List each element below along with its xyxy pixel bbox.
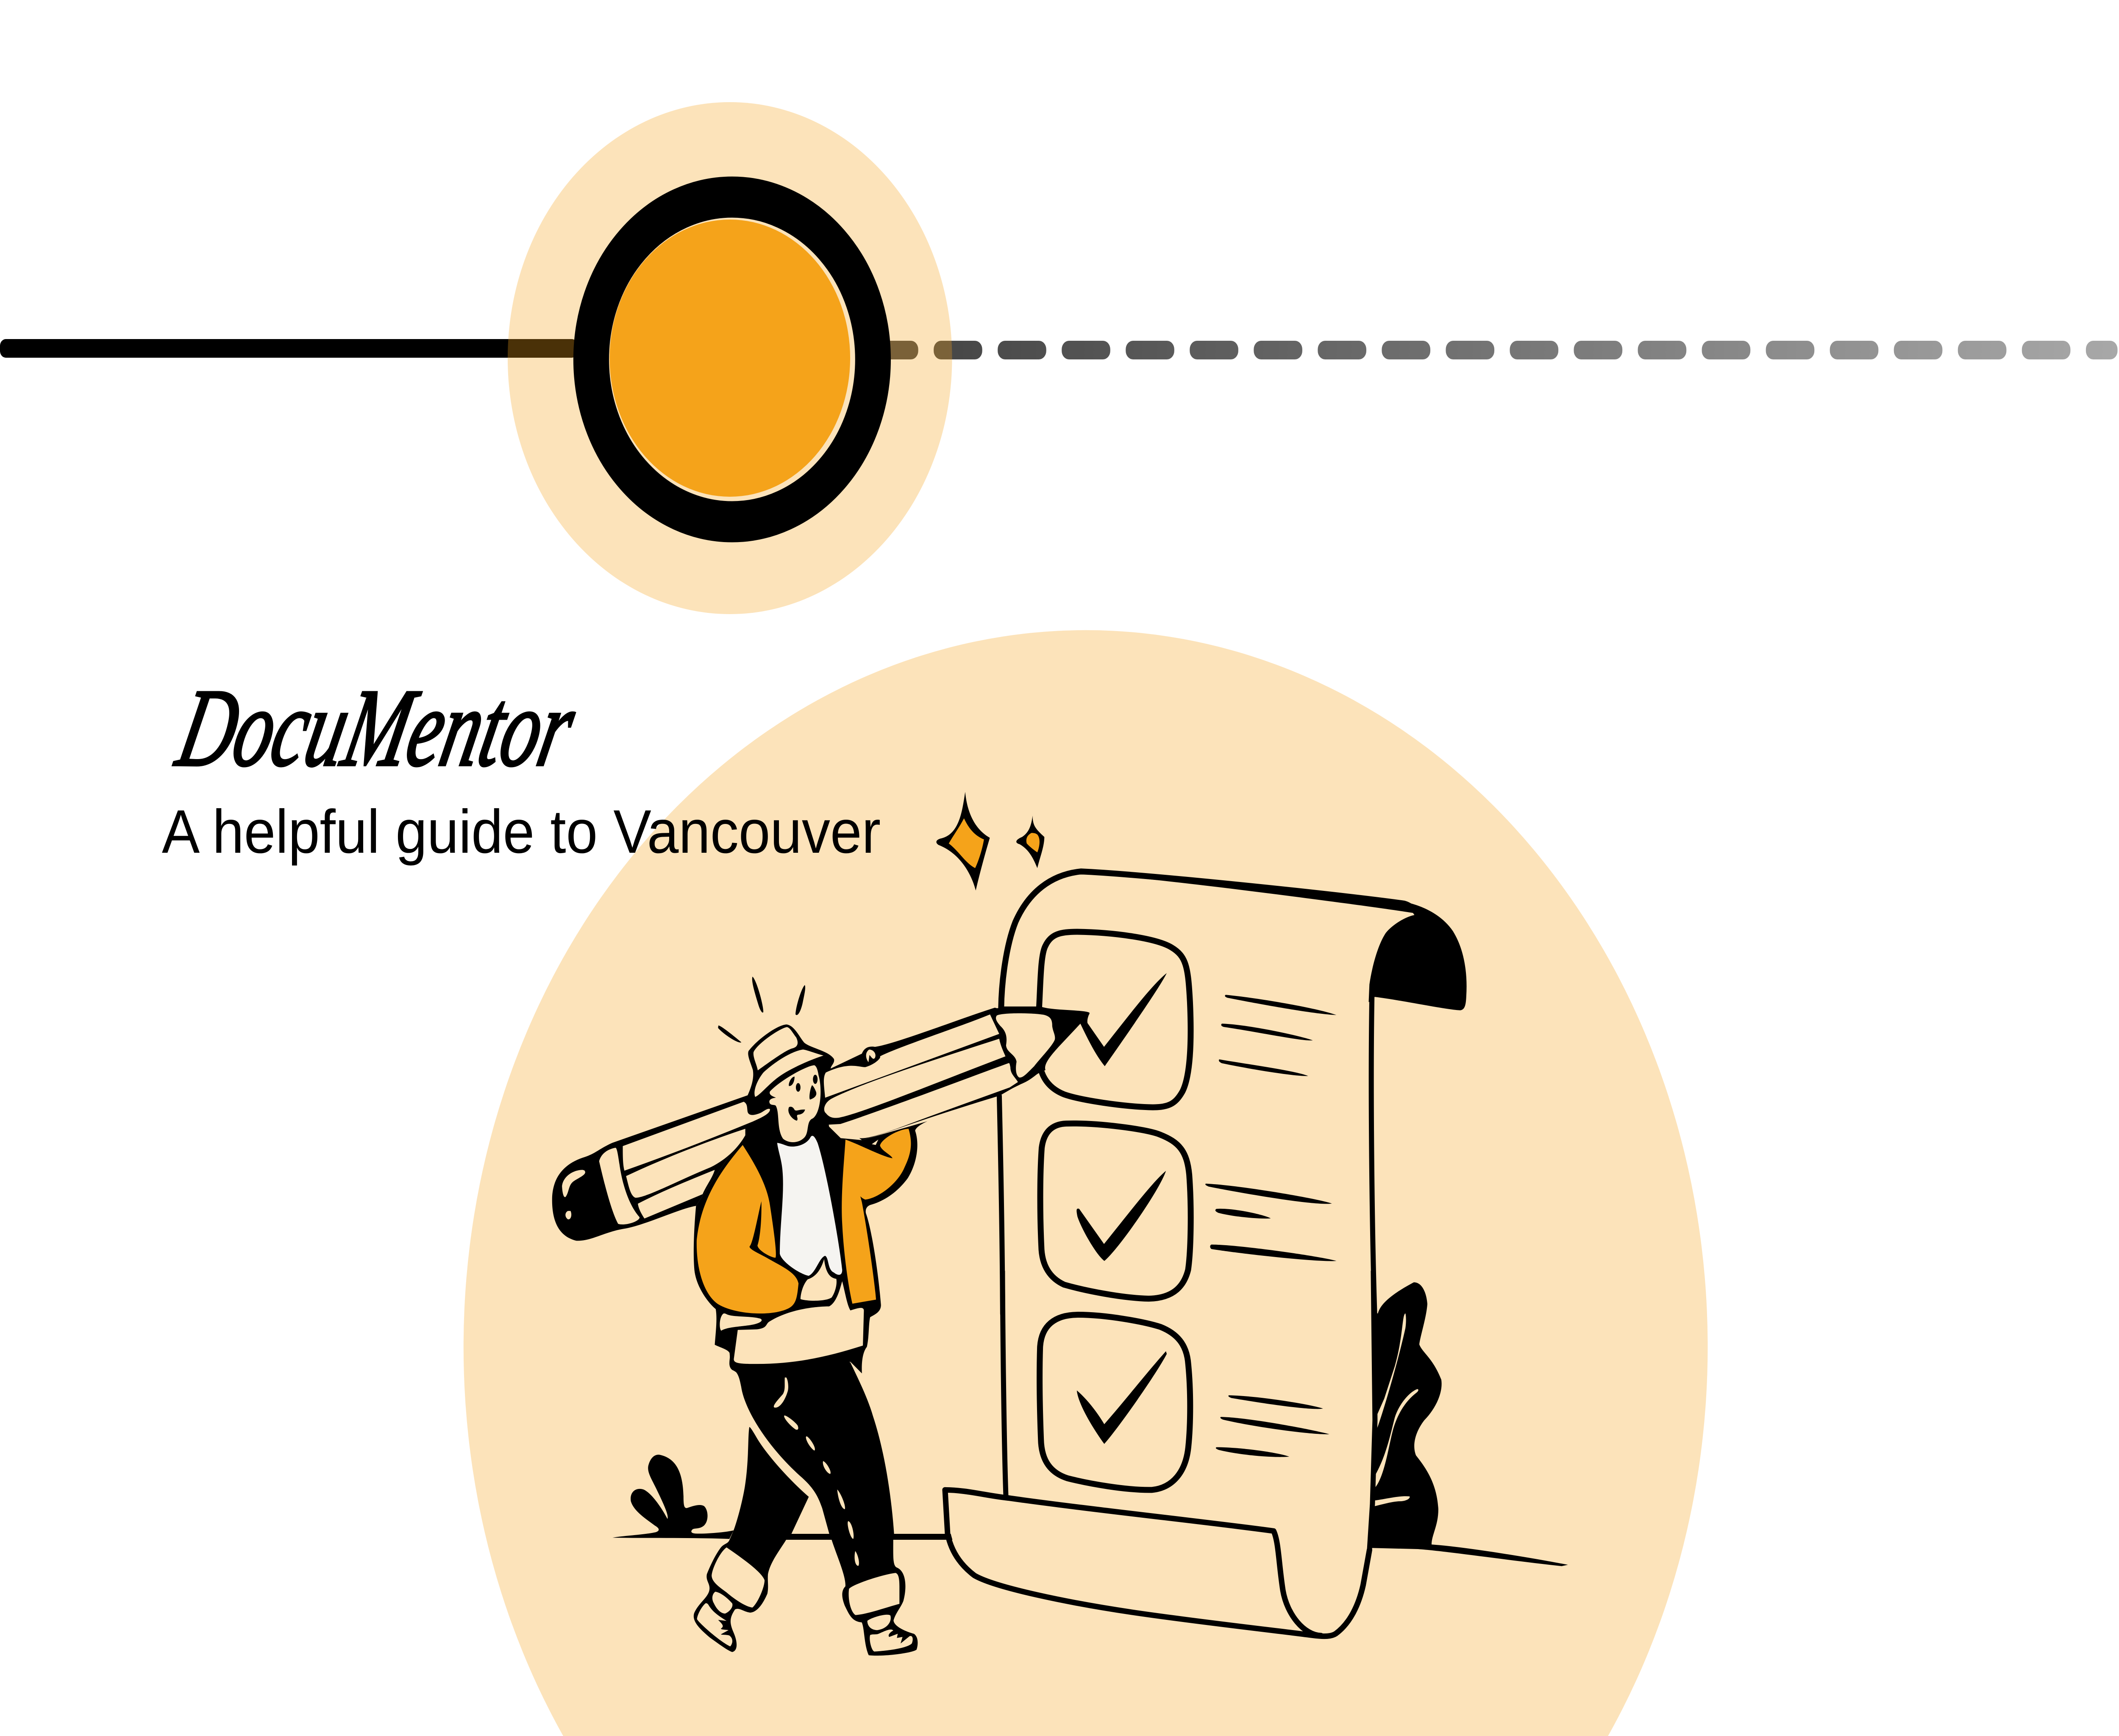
clothing details: [720, 1140, 879, 1364]
facial features: [788, 1075, 818, 1121]
document scroll: [944, 870, 1467, 1637]
back leg and foot: [694, 1427, 809, 1652]
check mark 3: [1077, 1351, 1167, 1444]
shirt: [777, 1136, 842, 1276]
checkbox 3: [1040, 1315, 1190, 1490]
checkbox 1: [1039, 932, 1190, 1107]
check mark 2: [1076, 1171, 1166, 1261]
trouser stitching: [774, 1377, 859, 1566]
pencil tip wood: [996, 1013, 1055, 1077]
person legs: [694, 1350, 918, 1655]
checklist lines row 2: [1205, 1184, 1336, 1261]
document upper section with first two checklist rows: [999, 871, 1467, 1314]
check mark 1: [1080, 973, 1167, 1066]
subtitle: A helpful guide to Vancouver: [162, 797, 881, 866]
front leg and foot: [729, 1350, 918, 1655]
solid timeline bar: [0, 339, 578, 358]
big background circle: [464, 630, 1708, 1736]
icon: left plant: [612, 1455, 734, 1539]
checkbox 2: [1040, 1124, 1191, 1299]
person upper body carrying pencil: [552, 976, 1018, 1377]
scroll roll: [1369, 902, 1467, 1010]
icon: right plant: [1342, 1283, 1568, 1566]
dashed timeline: [870, 341, 2118, 359]
document paper fill: [944, 870, 1467, 1637]
jacket right panel: [842, 1129, 911, 1304]
ground line: [773, 1534, 957, 1540]
title: DocuMentor: [167, 666, 585, 789]
torso silhouette: [694, 1121, 928, 1377]
document lower section with third checklist row and fold: [945, 1271, 1375, 1636]
pencil tip outline: [982, 1007, 1090, 1096]
checklist lines row 3: [1216, 1395, 1329, 1457]
motion lines: [718, 976, 805, 1043]
checklist lines row 1: [1219, 995, 1336, 1076]
timeline marker: halo, ring and orange dot: [508, 102, 952, 614]
icon: sparkle stars: [936, 792, 1044, 890]
hat: [754, 1027, 823, 1097]
pencil body outline: [552, 1008, 1016, 1241]
face: [769, 1065, 820, 1142]
hat and neck silhouette: [744, 1024, 845, 1143]
pencil stripes: [562, 1015, 1018, 1224]
jacket left panel: [697, 1145, 798, 1313]
